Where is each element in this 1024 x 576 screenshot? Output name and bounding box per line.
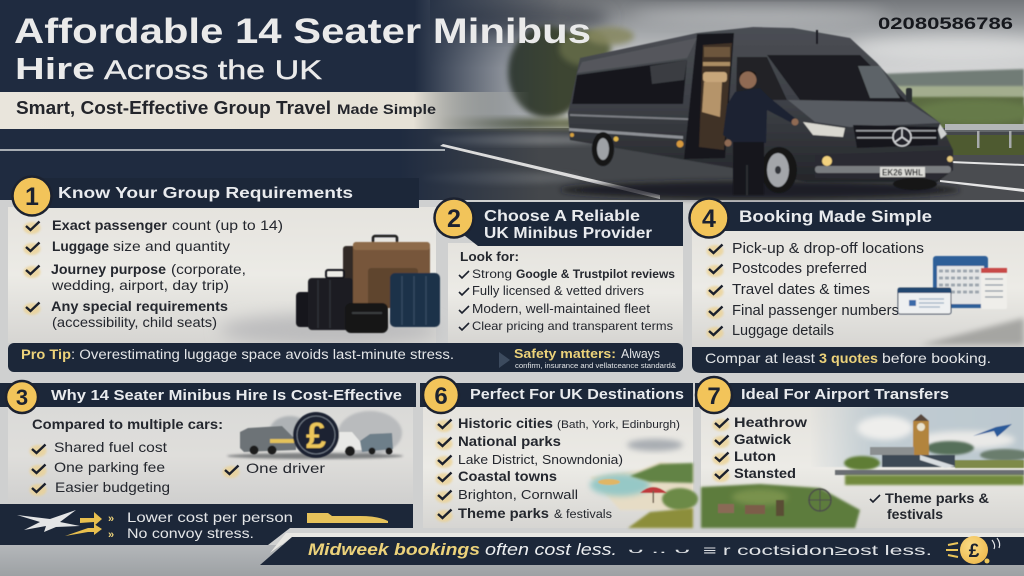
quotes bar: Compar at least bbox=[705, 350, 815, 366]
panel 3 checklist: One parking fee bbox=[54, 459, 165, 475]
panel 2 checklist: Strong bbox=[472, 267, 512, 281]
panel 2 heading: Choose A Reliable bbox=[484, 208, 640, 225]
panel 4 heading: Booking Made Simple bbox=[739, 207, 932, 226]
panel 2 checklist: Fully licensed & vetted drivers bbox=[472, 284, 644, 298]
safety callout: Always bbox=[621, 347, 660, 361]
panel 1 heading: Know Your Group Requirements bbox=[58, 185, 353, 202]
panel 7 checklist: Theme parks & bbox=[885, 491, 989, 506]
panel 2 checklist: Google & Trustpilot reviews bbox=[516, 267, 675, 281]
windscreen bbox=[767, 55, 907, 102]
quotes bar: before booking. bbox=[882, 350, 991, 366]
bottom banner: midweek bookings: often cost less. bbox=[485, 540, 617, 559]
panel 1 checklist: Luggage bbox=[52, 238, 109, 254]
panel 6 checklist: Theme parks bbox=[458, 506, 549, 521]
panel 3 checklist: One driver bbox=[246, 460, 325, 476]
panel 7 checklist: Luton bbox=[734, 448, 776, 464]
benefit bar: Lower cost per person bbox=[127, 509, 293, 525]
panel 3: why cost-effective bbox=[0, 381, 416, 545]
subtitle banner: Made Simple bbox=[337, 101, 436, 117]
coastal scene illustration bbox=[590, 439, 698, 528]
panel 6 heading: 6 bbox=[434, 383, 448, 410]
panel 6 checklist: Brighton, Cornwall bbox=[458, 487, 578, 502]
navy overlay on the left of the hero bbox=[0, 0, 560, 128]
panel 7 checklist: Stansted bbox=[734, 465, 796, 481]
icon: luggage pile bbox=[296, 236, 440, 333]
panel 3 heading bbox=[0, 381, 416, 413]
benefit bar: » bbox=[108, 513, 114, 525]
driver bbox=[723, 70, 798, 195]
panel 2 heading bbox=[434, 198, 683, 246]
panel 7 heading: 7 bbox=[707, 383, 721, 410]
panel 2 checklist: Modern, well-maintained fleet bbox=[472, 302, 651, 316]
panel 6 checklist: Historic cities bbox=[458, 416, 553, 431]
title bbox=[14, 12, 591, 86]
panel 1 checklist: size and quantity bbox=[113, 238, 230, 254]
panel 7 checklist: festivals bbox=[887, 507, 943, 522]
panel 1 checklist: count (up to 14) bbox=[172, 217, 283, 233]
quotes bar: 3 quotes bbox=[819, 350, 878, 366]
panel 6 heading: Perfect For UK Destinations bbox=[470, 386, 684, 403]
panel 4 checklist: Pick-up & drop-off locations bbox=[732, 241, 924, 257]
panel 7 checklist bbox=[712, 414, 989, 522]
panel 4 checklist: Final passenger numbers bbox=[732, 303, 899, 319]
open door and interior bbox=[684, 33, 734, 159]
panel 3 heading: 3 bbox=[16, 385, 28, 410]
panel 6 checklist: National parks bbox=[458, 434, 561, 449]
minibus and driver photo bbox=[560, 27, 960, 199]
benefit bar: » bbox=[108, 529, 114, 541]
pro tip bar: Pro Tip bbox=[21, 347, 71, 362]
trees left of the van bbox=[440, 26, 634, 129]
panel 3 checklist: Easier budgeting bbox=[55, 479, 170, 495]
icon: cars with pound coin bbox=[227, 411, 403, 459]
village and ferris wheel illustration bbox=[701, 484, 860, 528]
pro tip bar: : Overestimating luggage space avoids last-minute stress. bbox=[71, 347, 454, 362]
panel 3 checklist: Shared fuel cost bbox=[54, 439, 167, 455]
bottom banner: midweek bookings: ᴗ .. ᴗ bbox=[628, 542, 691, 556]
panel 7 heading: Ideal For Airport Transfers bbox=[741, 386, 949, 403]
bottom strip background bbox=[0, 545, 1024, 576]
panel 6 heading bbox=[420, 377, 693, 413]
panel 3 checklist bbox=[30, 417, 325, 496]
icon: yellow arrows bbox=[65, 512, 102, 536]
number plate: EK26 WHL bbox=[882, 168, 923, 178]
panel 3 heading: Why 14 Seater Minibus Hire Is Cost-Effective bbox=[51, 387, 402, 404]
panel 1 checklist: Exact passenger bbox=[52, 217, 168, 233]
panel 4 checklist: Travel dates & times bbox=[732, 282, 870, 298]
panel 7: airport transfers bbox=[695, 377, 1024, 528]
icon: calendar and booking documents bbox=[898, 256, 1007, 314]
panel 4: booking made simple bbox=[690, 198, 1024, 373]
panel 6 checklist: (Bath, York, Edinburgh) bbox=[557, 419, 680, 431]
panel 2 heading: UK Minibus Provider bbox=[484, 225, 652, 242]
subtitle banner bbox=[0, 92, 530, 129]
panel 3 checklist: Compared to multiple cars: bbox=[32, 417, 223, 432]
panel 2 heading: 2 bbox=[447, 205, 461, 233]
title: Affordable 14 Seater Minibus bbox=[14, 12, 591, 51]
panel 6: UK destinations bbox=[420, 377, 698, 528]
van body bbox=[568, 27, 953, 182]
panel 1: know your group requirements bbox=[8, 176, 683, 372]
panel 1 checklist: Journey purpose bbox=[51, 261, 166, 277]
panel 4 checklist: Postcodes preferred bbox=[732, 261, 867, 277]
bonnet bbox=[788, 100, 940, 127]
panel 2: choose a reliable provider bbox=[434, 198, 683, 370]
panel 1 heading: 1 bbox=[25, 183, 39, 211]
bottom banner: midweek bookings: ≡ r coctsidon≥ost less. bbox=[703, 542, 932, 558]
pro tip bar bbox=[8, 343, 683, 372]
panel 1 checklist bbox=[24, 217, 283, 330]
road markings bbox=[0, 144, 660, 199]
panel 7 heading bbox=[695, 377, 1024, 413]
title: Hire bbox=[15, 51, 95, 86]
panel 4 heading bbox=[690, 198, 1024, 238]
safety callout: Safety matters: bbox=[514, 347, 616, 361]
panel 1 checklist: (accessibility, child seats) bbox=[52, 314, 217, 330]
subtitle banner: Smart, Cost-Effective Group Travel bbox=[16, 98, 331, 118]
front bumper and grille bbox=[853, 125, 938, 148]
panel 7 checklist: Gatwick bbox=[734, 431, 791, 447]
bottom banner: midweek bookings bbox=[260, 533, 1024, 565]
panel 1 checklist: (corporate, bbox=[171, 261, 246, 277]
panel 4 checklist bbox=[706, 241, 924, 339]
panel 1 checklist: wedding, airport, day trip) bbox=[51, 277, 229, 293]
benefit bar: No convoy stress. bbox=[127, 525, 254, 541]
bottom banner: midweek bookings: Midweek bookings bbox=[308, 540, 480, 559]
airport scene illustration bbox=[701, 407, 1024, 528]
panel 6 checklist bbox=[436, 416, 680, 522]
title: Across the UK bbox=[104, 55, 322, 85]
icon: plane silhouette bbox=[17, 510, 80, 532]
icon: pound coin bbox=[946, 536, 1000, 564]
van side windows bbox=[572, 60, 687, 104]
mirror and aerial bbox=[906, 88, 912, 102]
icon: pound coin: £ bbox=[969, 541, 980, 562]
quotes bar bbox=[692, 347, 1024, 373]
panel 2 checklist: Look for: bbox=[460, 249, 519, 264]
safety callout: confirm, insurance and vellatceance standard& bbox=[515, 363, 676, 370]
panel 1 heading bbox=[12, 176, 419, 216]
panel 4 heading: 4 bbox=[702, 205, 716, 233]
panel 2 checklist: Clear pricing and transparent terms bbox=[472, 319, 673, 333]
hero photo: sky, landscape and road bbox=[380, 0, 1024, 200]
panel 6 checklist: Coastal towns bbox=[458, 469, 557, 484]
panel 4 checklist: Luggage details bbox=[732, 323, 834, 339]
panel 6 checklist: & festivals bbox=[554, 509, 612, 521]
icon: cars with pound coin: £ bbox=[306, 415, 326, 456]
navy road on the left of the hero bbox=[0, 128, 540, 200]
panel 7 checklist: Heathrow bbox=[734, 414, 807, 430]
safety callout bbox=[499, 347, 676, 370]
wheels bbox=[592, 132, 937, 193]
phone number: 02080586786 bbox=[878, 14, 1013, 33]
panel 2 checklist bbox=[459, 249, 675, 333]
benefit bar bbox=[0, 504, 413, 545]
panel 1 checklist: Any special requirements bbox=[51, 298, 228, 314]
panel 6 checklist: Lake District, Snowndonia) bbox=[458, 452, 623, 467]
icon: yellow limousine bbox=[307, 513, 388, 523]
